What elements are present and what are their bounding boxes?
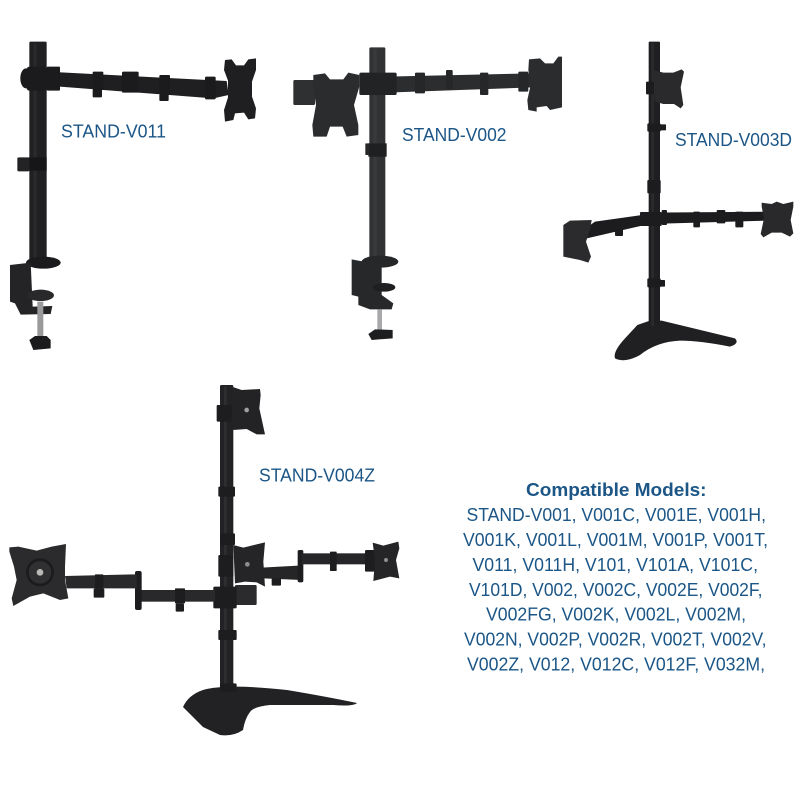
model list: STAND-V001, V001C, V001E, V001H, (466, 505, 766, 525)
text block: compatible models (463, 480, 768, 674)
model list: V002N, V002P, V002R, V002T, V002V, (464, 630, 766, 650)
stand base (183, 687, 357, 735)
product: STAND-V002 dual clamp mount (293, 47, 562, 340)
label: STAND-V002: STAND-V002 (402, 125, 506, 145)
product: STAND-V004Z triple arm stand (9, 385, 399, 735)
model list: V011, V011H, V101, V101A, V101C, (472, 555, 758, 575)
label: STAND-V004Z: STAND-V004Z (259, 466, 375, 486)
product: STAND-V011 single clamp mount (10, 42, 256, 350)
left VESA plate (9, 544, 68, 606)
model list (463, 505, 768, 674)
heading: compatible models: Compatible Models: (526, 480, 706, 500)
label: STAND-V011: STAND-V011 (61, 122, 166, 142)
model list: V101D, V002, V002C, V002E, V002F, (469, 580, 762, 600)
label: STAND-V003D: STAND-V003D (675, 130, 792, 150)
model list: V002Z, V012, V012C, V012F, V032M, (467, 654, 765, 674)
model list: V001K, V001L, V001M, V001P, V001T, (463, 530, 768, 550)
product: STAND-V003D triple desk stand (563, 42, 793, 360)
model list: V002FG, V002K, V002L, V002M, (486, 604, 746, 624)
